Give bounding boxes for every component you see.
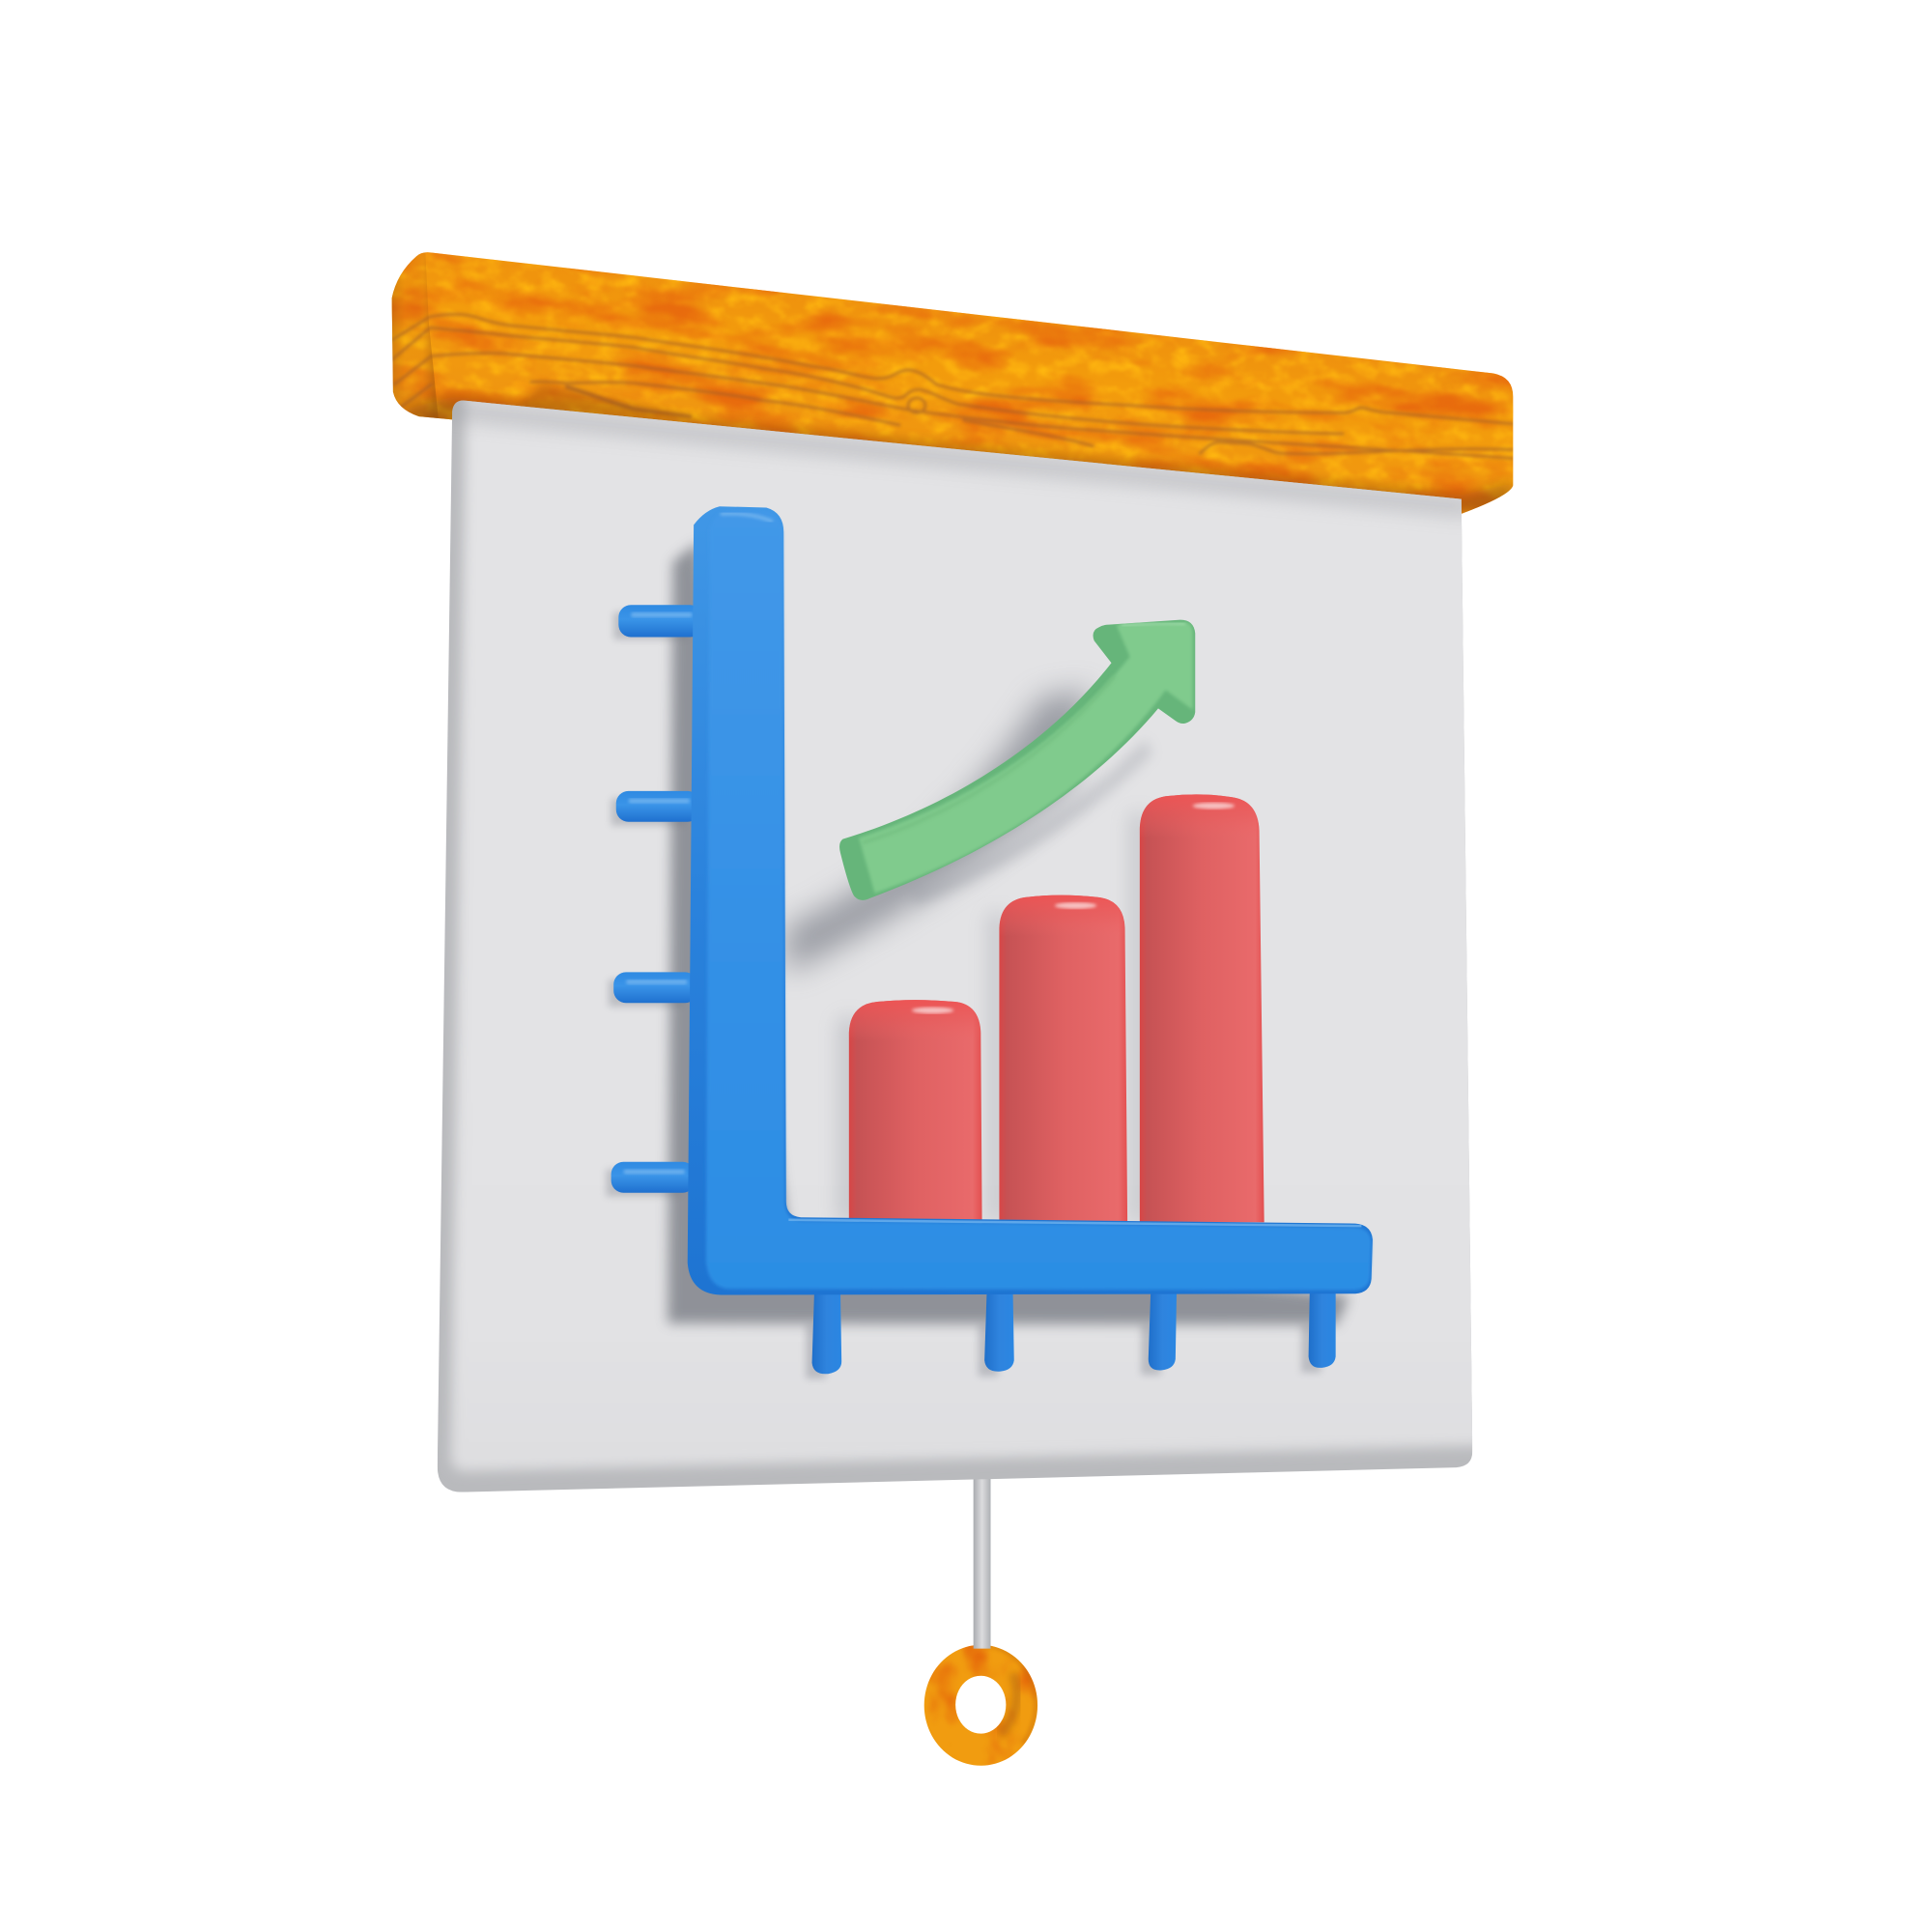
tick shadows bbox=[607, 612, 1321, 1378]
panel: projection screen bbox=[419, 382, 1491, 1503]
y-axis ticks bbox=[611, 605, 702, 1193]
arrow shadow bbox=[786, 690, 1091, 974]
bar 2 bbox=[999, 895, 1127, 1221]
illustration: presentation board with growth chart bbox=[392, 252, 1513, 1766]
pull cord bbox=[974, 1479, 991, 1649]
bar 1 bbox=[849, 1000, 982, 1220]
L-shaped axis bbox=[688, 506, 1373, 1295]
wood lower shading bbox=[407, 397, 1513, 518]
axis shadow bbox=[668, 542, 1350, 1324]
x-axis ticks bbox=[812, 1288, 1336, 1374]
bar 3 bbox=[1140, 794, 1264, 1222]
chart: bars and axes bbox=[611, 506, 1373, 1374]
arrow main face bbox=[859, 622, 1193, 894]
wood end face bbox=[392, 253, 439, 418]
growth arrow bbox=[839, 620, 1195, 900]
bar shadows bbox=[838, 813, 1148, 1224]
wooden roller bar bbox=[392, 252, 1513, 514]
wood grain lines bbox=[392, 314, 1513, 458]
wood shadow on panel bbox=[443, 402, 1472, 515]
pull ring bbox=[923, 1645, 1037, 1766]
